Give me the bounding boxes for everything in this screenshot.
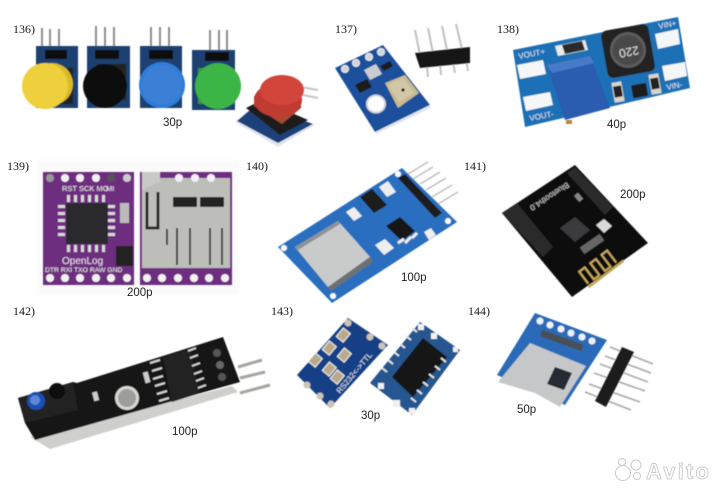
converter board [513, 17, 690, 127]
label 136: 136) [13, 22, 35, 36]
converter board: VOUT+ [518, 47, 546, 61]
tracking sensor board [18, 337, 270, 449]
label 139: 139) [7, 159, 29, 173]
OpenLog rear board with card slot [140, 172, 232, 285]
photo backdrop [37, 160, 239, 295]
microSD adapter board [278, 162, 458, 303]
item 139: OpenLog boards [7, 159, 239, 299]
label 144: 144) [468, 304, 490, 318]
price 139: 200р [127, 287, 153, 299]
RS232 board rear [297, 318, 388, 408]
OpenLog front board: MI [106, 184, 114, 193]
blue button module [139, 27, 185, 108]
red button module [235, 75, 318, 147]
price 144: 50р [517, 404, 536, 416]
label 141: 141) [464, 159, 486, 173]
microSD breakout board [497, 313, 607, 407]
label 143: 143) [271, 304, 293, 318]
converter board: VIN+ [658, 19, 677, 31]
pin header 137 [415, 24, 470, 77]
price 141: 200р [620, 189, 646, 201]
label 137: 137) [335, 22, 357, 36]
converter board: 220 [617, 43, 640, 61]
OpenLog front board: OpenLog [62, 256, 103, 267]
item 142: line tracking sensor [13, 304, 270, 449]
price 136: 30р [163, 117, 182, 129]
Bluetooth board [502, 165, 648, 297]
item 141: Bluetooth 4.0 board [464, 159, 648, 297]
price 142: 100р [172, 426, 198, 438]
label 142: 142) [13, 304, 35, 318]
converter board: VIN- [666, 80, 683, 92]
pin header 144 [585, 347, 653, 410]
RS232 board front [370, 322, 460, 415]
item 136: push button modules [13, 22, 318, 147]
black button module [83, 26, 130, 108]
watermark icon circles [616, 458, 641, 480]
green button module [192, 30, 241, 110]
yellow button module [22, 28, 78, 109]
converter board: VOUT- [529, 109, 555, 123]
price 140: 100р [401, 272, 427, 284]
Bluetooth board: Bluetooth4.0 [528, 180, 571, 213]
RS232 board rear: RS232<->TTL [335, 350, 374, 395]
Avito watermark [616, 458, 709, 484]
item 138: boost converter [497, 17, 690, 131]
item 137: sensor board and pin header [335, 22, 470, 134]
item 140: microSD card adapter [246, 159, 458, 303]
label 138: 138) [497, 22, 519, 36]
watermark wordmark: Avito [646, 459, 709, 484]
item 144: microSD breakout [468, 304, 653, 416]
price 138: 40р [607, 119, 626, 131]
OpenLog front board [43, 172, 134, 285]
OpenLog front board: DTR RXI TXO RAW GND [45, 267, 123, 274]
sensor board [335, 45, 431, 134]
label 140: 140) [246, 159, 268, 173]
OpenLog front board: RST SCK MO [62, 184, 109, 193]
price 143: 30р [361, 410, 380, 422]
item 143: RS232 to TTL boards [271, 304, 460, 422]
